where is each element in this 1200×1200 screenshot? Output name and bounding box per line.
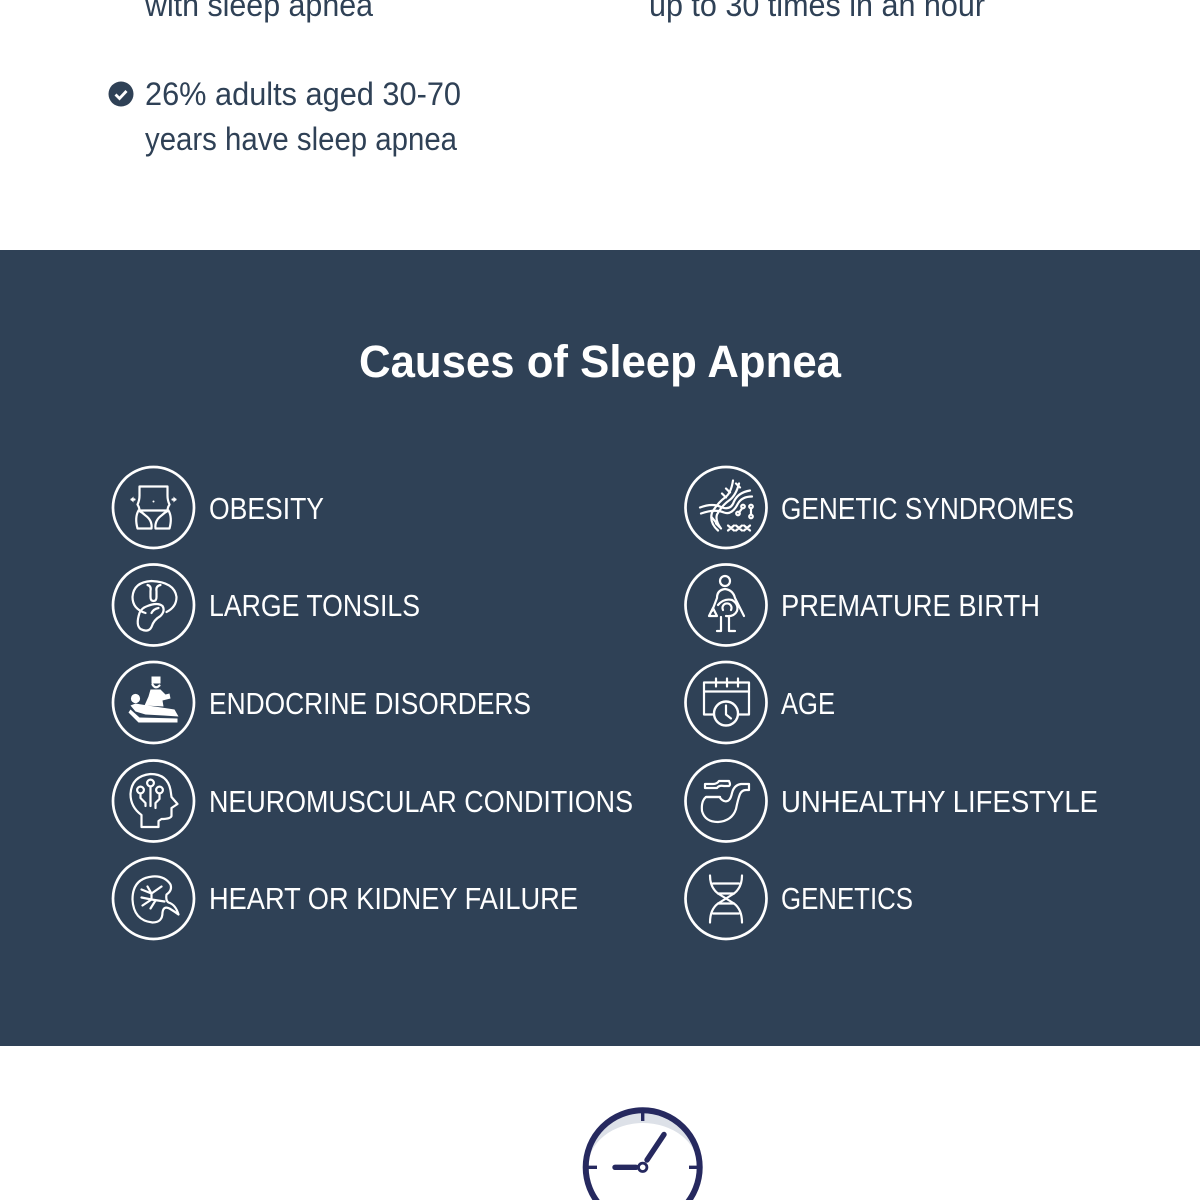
cause: neuromuscular conditions <box>113 760 633 842</box>
label: GENETIC SYNDROMES <box>781 491 1074 526</box>
cause: heart or kidney failure <box>113 858 578 939</box>
icon: dna strand with chromosomes <box>686 467 766 548</box>
icon: head with circuits <box>113 760 194 842</box>
cause: endocrine disorders <box>113 662 531 743</box>
label: PREMATURE BIRTH <box>781 588 1040 623</box>
icon: pregnant figure <box>686 564 766 646</box>
icon: clock <box>585 1108 701 1200</box>
label: LARGE TONSILS <box>209 588 420 623</box>
icon: doctor and patient <box>113 662 194 743</box>
text: adults statistic: years have sleep apnea <box>145 121 457 157</box>
label: AGE <box>781 686 835 721</box>
heading: Causes of Sleep Apnea <box>359 336 842 387</box>
cause: unhealthy lifestyle <box>686 760 1098 842</box>
panel: causes of sleep apnea <box>0 250 1200 1046</box>
icon: check bullet <box>108 82 134 106</box>
label: ENDOCRINE DISORDERS <box>209 686 531 721</box>
cause: genetics <box>686 858 913 939</box>
text: adults statistic <box>145 76 461 157</box>
icon: smoking pipe <box>686 760 766 842</box>
cause: large tonsils <box>113 564 420 646</box>
cause: obesity <box>113 467 324 548</box>
icon: kidney <box>113 858 194 939</box>
label: NEUROMUSCULAR CONDITIONS <box>209 784 633 819</box>
icon: double helix <box>686 858 766 939</box>
label: HEART OR KIDNEY FAILURE <box>209 881 578 916</box>
icon: waist <box>113 467 194 548</box>
text: adults statistic: 26% adults aged 30-70 <box>145 76 461 112</box>
label: GENETICS <box>781 881 913 916</box>
cause: age <box>686 662 835 743</box>
cause: genetic syndromes <box>686 467 1074 548</box>
icon: calendar with clock <box>686 662 766 743</box>
label: OBESITY <box>209 491 324 526</box>
icon: tongue and mouth <box>113 564 194 646</box>
label: UNHEALTHY LIFESTYLE <box>781 784 1098 819</box>
cause: premature birth <box>686 564 1040 646</box>
